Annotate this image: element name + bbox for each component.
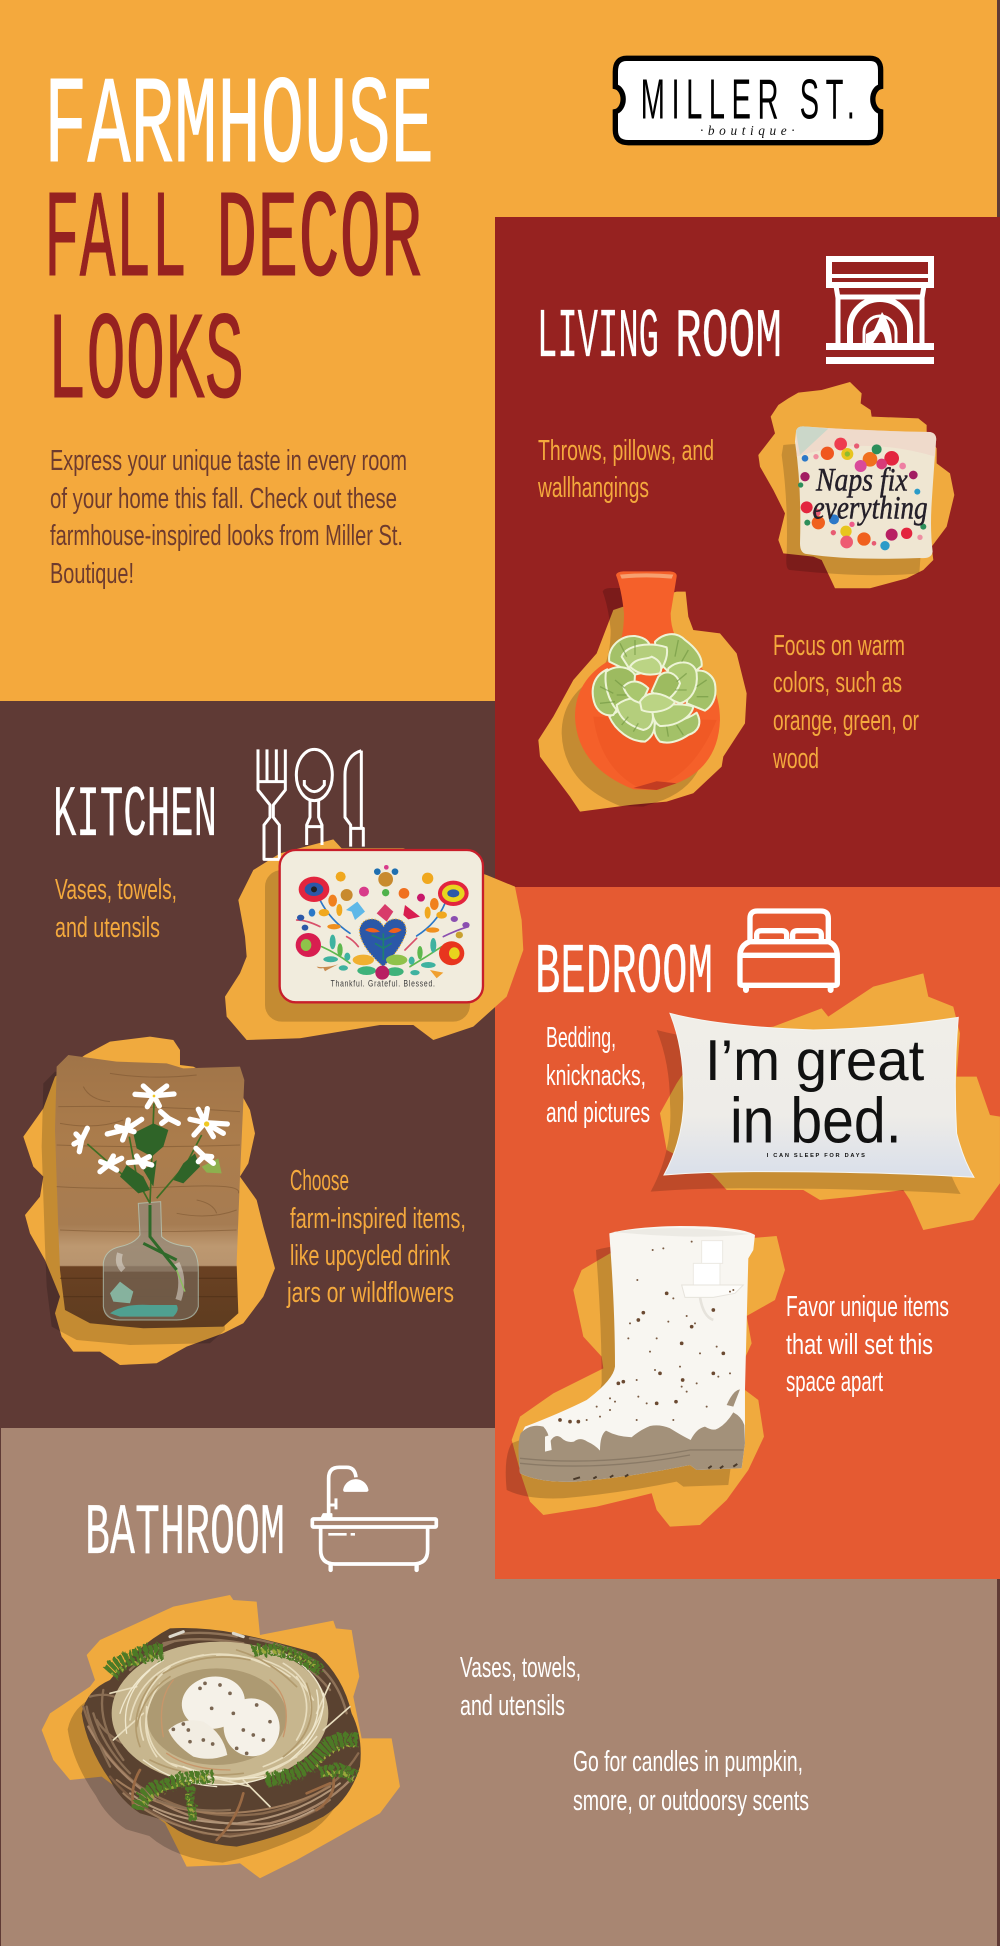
text: choose farm-inspired items: farm-inspired items, [290,1203,466,1235]
image: floral trivet [265,850,483,1022]
heading: living room: ROOM [675,299,782,378]
intro text block: Boutique! [50,558,134,590]
title: FALL [44,173,187,313]
text: focus on warm colors [772,630,919,775]
text: bedding, knicknacks: and pictures [546,1097,650,1129]
text: focus on warm colors: colors, such as [773,667,902,699]
image: Naps fix everything pillow [758,382,954,588]
title [44,59,434,435]
title: DECOR [216,173,422,313]
text: vases, towels, and utensils (bathroom): and utensils [460,1690,565,1722]
panel: kitchen background [0,701,495,1428]
intro text block: farmhouse-inspired looks from Miller St. [50,520,403,552]
image: wildflowers in glass jar [23,1037,275,1365]
text: throws, pillows [537,435,714,504]
text: favor unique items: that will set this [786,1329,933,1361]
text: favor unique items: space apart [786,1366,883,1398]
panel: header background [0,0,997,701]
text: choose farm-inspired items [286,1165,466,1309]
heading: bathroom: BATHROOM [85,1493,285,1575]
panel: bedroom background [495,887,1000,1579]
text: bedding, knicknacks: knicknacks, [546,1060,646,1092]
heading: bedroom: BEDROOM [535,934,713,1014]
text: choose farm-inspired items: jars or wildflowers [286,1277,454,1309]
image blob: trivet backing [225,839,523,1040]
text: throws, pillows: Throws, pillows, and [538,435,714,467]
intro text block: Express your unique taste in every room [50,445,407,477]
text: focus on warm colors: orange, green, or [773,705,919,737]
text: choose farm-inspired items: Choose [290,1165,349,1197]
icon: bathtub [312,1467,436,1570]
image: bird nest with eggs [42,1595,400,1878]
text: go for candles [573,1746,809,1817]
intro text block: of your home this fall. Check out these [50,483,397,515]
icon: fireplace [826,259,934,360]
text: bedding, knicknacks [546,1022,650,1129]
logo: Miller St. boutique sign: ·boutique· [700,123,795,138]
text: vases, towels [55,874,177,944]
text: focus on warm colors: wood [772,743,819,775]
image: Naps fix everything pillow: everything [813,490,928,526]
image: I'm great in bed pillow [651,973,1000,1230]
text: throws, pillows: wallhangings [537,472,649,504]
title: FARMHOUSE [44,59,434,199]
image: Naps fix everything pillow: Naps fix [815,463,908,499]
text: focus on warm colors: Focus on warm [773,630,905,662]
image: muddy white boot [506,1226,785,1527]
text: go for candles: smore, or outdoorsy scents [573,1785,809,1817]
text: vases, towels, and utensils (bathroom) [460,1652,581,1722]
intro text block [50,445,407,590]
text: go for candles: Go for candles in pumpkin, [573,1746,803,1778]
text: vases, towels: Vases, towels, [55,874,177,906]
image: I'm great in bed pillow: I’m great [705,1029,924,1093]
panel: bathroom background [1,1428,997,1946]
icon: bed [740,911,837,990]
title: LOOKS [47,295,244,435]
text: bedding, knicknacks: Bedding, [546,1022,616,1054]
text: vases, towels, and utensils (bathroom): Vases, towels, [460,1652,581,1684]
text: choose farm-inspired items: like upcycled drink [290,1240,450,1272]
heading: living room: LIVING [537,299,659,378]
heading: kitchen: KITCHEN [53,775,217,857]
logo: Miller St. boutique sign [615,58,881,143]
image: I'm great in bed pillow: I CAN SLEEP FOR DAYS [767,1153,865,1159]
panel: living room background [495,217,1000,888]
icon: cutlery [258,749,363,859]
text: vases, towels: and utensils [55,912,160,944]
image: floral trivet: Thankful. Grateful. Blessed. [331,979,436,989]
image: orange vase with green flower [538,571,747,812]
image: I'm great in bed pillow: in bed. [730,1085,902,1157]
text: favor unique items [786,1291,949,1398]
